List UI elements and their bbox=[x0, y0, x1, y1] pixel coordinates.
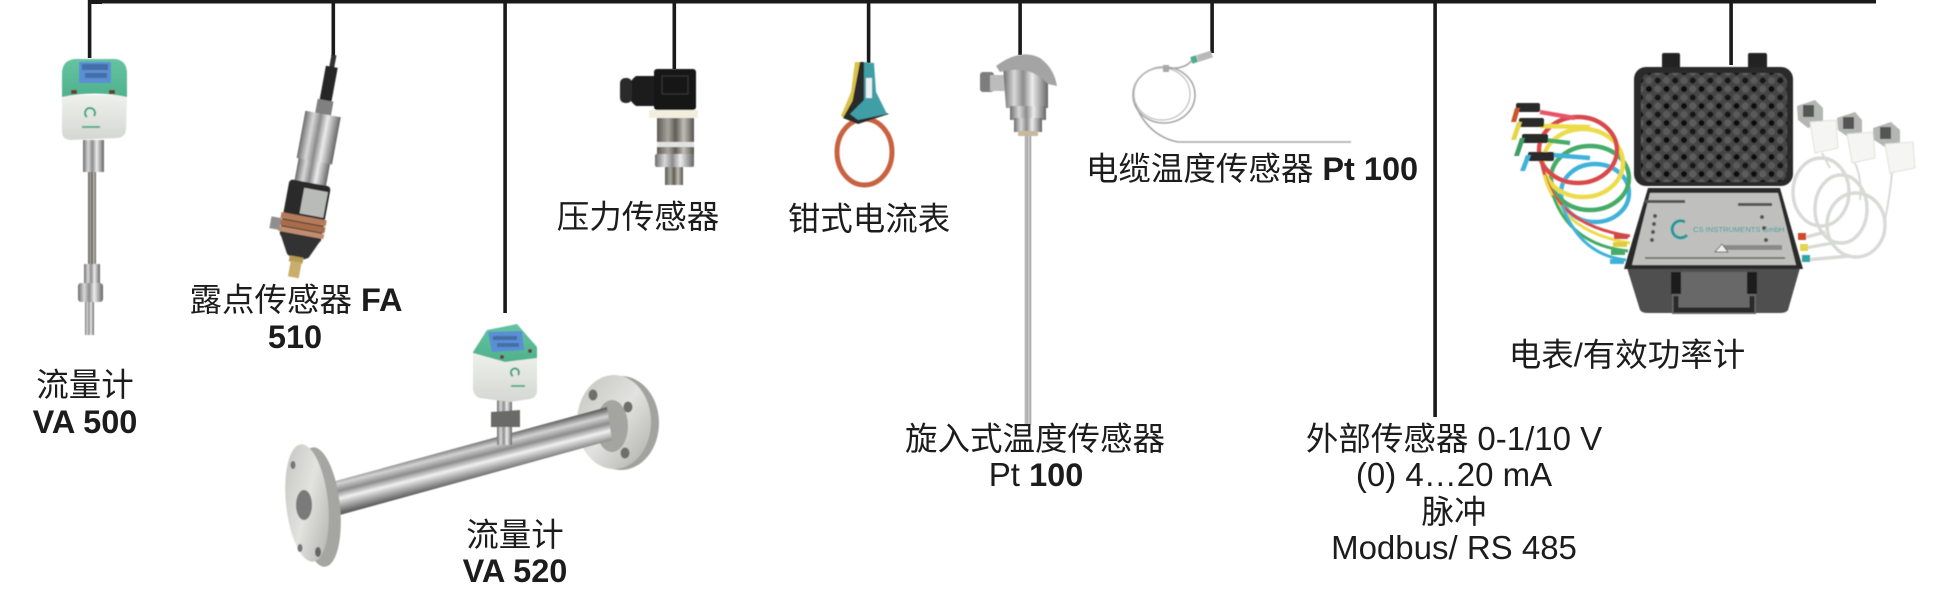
label: pressure sensor: 压力传感器 bbox=[557, 199, 719, 235]
left flange bbox=[280, 442, 346, 569]
test probes bbox=[1511, 103, 1554, 171]
label: clamp ammeter: 钳式电流表 bbox=[788, 201, 950, 237]
pipe bbox=[332, 407, 612, 515]
case base and front panel: CS INSTRUMENTS GmbH bbox=[1693, 225, 1785, 234]
label: flow meter VA 520: VA 520 bbox=[463, 553, 567, 589]
label: screw-in temperature sensor Pt 100: Pt 100 bbox=[989, 456, 1083, 493]
label: cable temperature sensor Pt 100: 电缆温度传感器 Pt 100 bbox=[1086, 151, 1418, 187]
label: power meter: 电表/有效功率计 bbox=[1509, 337, 1745, 373]
case lid with foam bbox=[1634, 53, 1793, 186]
product: screw-in temperature sensor bbox=[980, 54, 1057, 425]
test leads, coloured bbox=[1539, 112, 1630, 260]
label: flow meter VA 500: VA 500 bbox=[33, 404, 137, 440]
product: flow meter VA 520 bbox=[280, 324, 659, 569]
connection bus: top line and drop lines bbox=[88, 0, 1876, 417]
label: screw-in temperature sensor Pt 100: 旋入式温度传感器 bbox=[905, 421, 1165, 457]
product: flow meter VA 500 bbox=[62, 59, 127, 335]
label: external sensors: 脉冲 bbox=[1421, 494, 1487, 530]
product: clamp ammeter bbox=[837, 62, 892, 185]
product: power meter case bbox=[1511, 53, 1915, 314]
current clamps and white cables bbox=[1793, 100, 1915, 260]
label: dew point sensor FA 510: 510 bbox=[268, 319, 322, 355]
case base and front panel bbox=[1610, 188, 1810, 314]
label: external sensors: 外部传感器 0-1/10 V bbox=[1306, 420, 1602, 457]
label: flow meter VA 500: 流量计 bbox=[36, 367, 134, 403]
label: external sensors: Modbus/ RS 485 bbox=[1331, 529, 1577, 566]
product: dew point sensor FA 510 bbox=[261, 49, 357, 281]
label: dew point sensor FA 510: 露点传感器 FA bbox=[189, 282, 403, 318]
head bbox=[473, 353, 537, 402]
stem and nut bbox=[497, 398, 512, 445]
right flange bbox=[577, 375, 659, 470]
product: cable temperature sensor bbox=[1133, 51, 1351, 142]
label: external sensors: (0) 4…20 mA bbox=[1356, 456, 1552, 493]
label: flow meter VA 520: 流量计 bbox=[466, 517, 564, 553]
product: pressure sensor bbox=[620, 69, 698, 185]
